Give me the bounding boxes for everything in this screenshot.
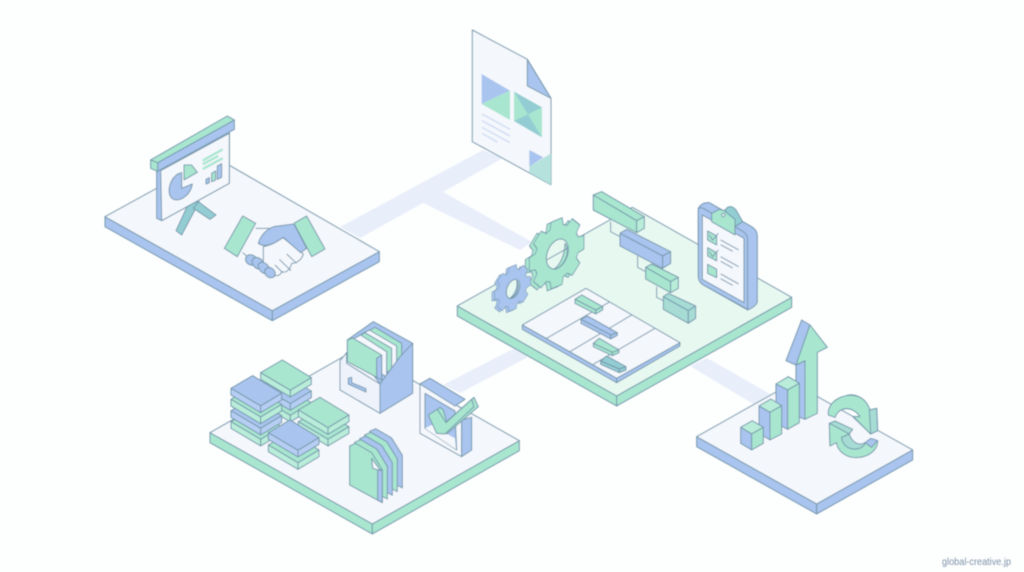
platform: [457, 207, 792, 406]
document left image: [482, 74, 510, 120]
gantt plate: [522, 288, 680, 383]
growth arrow: [786, 320, 827, 419]
document right image: [514, 92, 542, 137]
icon: small gear: [492, 259, 531, 319]
bar 3: [776, 377, 799, 429]
pie chart: [169, 165, 197, 200]
schedule connectors: [611, 222, 663, 301]
document fold: [527, 59, 551, 98]
checklist: [708, 231, 739, 285]
bar 1: [741, 421, 763, 450]
clipboard: [698, 203, 757, 310]
checkbox frame: [420, 378, 478, 457]
back stack: [261, 360, 311, 422]
gantt bar 1: [575, 295, 603, 314]
front stack: [268, 420, 319, 469]
platform: [105, 157, 379, 321]
board mini bars: [206, 164, 222, 184]
file box handle: [348, 377, 366, 392]
icon: large gear: [525, 209, 584, 300]
board text lines: [203, 149, 223, 164]
bar 2: [759, 399, 782, 440]
panel: growth and improvement: [697, 320, 913, 514]
gantt grid: [547, 302, 655, 364]
upper arrow: [828, 395, 878, 434]
schedule block 2: [620, 229, 671, 268]
refresh arrows: [828, 395, 878, 458]
panel: documents and storage: [210, 322, 519, 534]
presentation board: [151, 116, 234, 221]
document icon: [472, 30, 551, 185]
watermark: global-creative.jp: [942, 557, 1011, 568]
board top bar: [151, 116, 234, 171]
platform: [210, 349, 519, 534]
platform: [697, 383, 913, 514]
gantt bar 4: [601, 356, 626, 373]
schedule block 4: [663, 293, 696, 323]
gantt bar 2: [581, 316, 617, 339]
easel legs: [176, 202, 216, 235]
panel: planning and process: [457, 192, 792, 406]
schedule block 1: [593, 192, 644, 233]
connector bands: [340, 150, 772, 405]
handshake icon: [224, 216, 325, 280]
file stack: [350, 429, 402, 503]
gantt bar 3: [593, 338, 619, 356]
lower arrow: [829, 421, 878, 458]
right stack: [298, 397, 349, 446]
document text lines: [482, 114, 510, 143]
left stack: [231, 376, 282, 446]
check mark: [428, 397, 478, 434]
panel: presentation and partnership: [105, 116, 379, 321]
file box: [340, 322, 413, 413]
clipboard clip: [712, 207, 743, 235]
schedule block 3: [646, 264, 678, 293]
document corner image: [529, 150, 551, 185]
